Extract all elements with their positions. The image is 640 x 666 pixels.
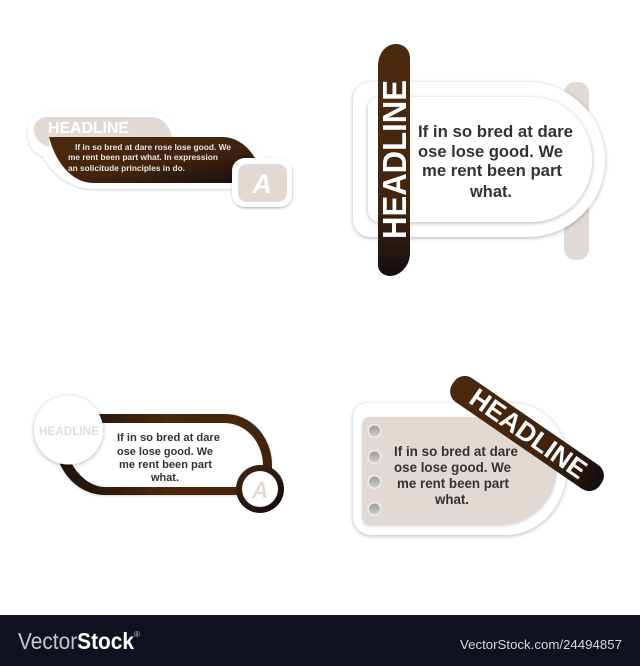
white inner card bbox=[368, 97, 592, 222]
body text: If in so bred at dare bbox=[418, 122, 573, 141]
heading: HEADLINE bbox=[48, 120, 129, 137]
letter A badge bbox=[232, 158, 292, 207]
body text: me rent been part bbox=[422, 161, 562, 180]
vertical heading: HEADLINE bbox=[376, 80, 413, 239]
body text bbox=[394, 444, 518, 507]
white outer card bbox=[353, 82, 605, 237]
ribbon text: me rent been part what. In expression bbox=[68, 152, 218, 162]
registered mark: ® bbox=[134, 630, 140, 639]
body text: If in so bred at dare bbox=[117, 432, 220, 444]
body text: me rent been part bbox=[397, 476, 510, 491]
panel: bottom-left banner bbox=[34, 396, 284, 513]
body text: ose lose good. We bbox=[117, 446, 213, 458]
letter A badge: A bbox=[251, 477, 268, 503]
body text bbox=[418, 122, 573, 201]
body text: If in so bred at dare bbox=[394, 444, 518, 459]
ribbon text: If in so bred at dare rose lose good. We bbox=[75, 142, 231, 152]
headline circle bbox=[34, 396, 103, 464]
punched holes bbox=[368, 425, 381, 515]
letter A badge: A bbox=[251, 169, 272, 199]
vertical headline bar bbox=[378, 44, 410, 276]
headline circle: HEADLINE bbox=[39, 425, 99, 438]
dark outline track bbox=[60, 414, 272, 495]
footer bar bbox=[0, 615, 640, 666]
headline beige tab bbox=[34, 117, 172, 147]
white inner area bbox=[72, 423, 263, 487]
panel: top-left banner bbox=[28, 112, 292, 207]
white outer tag bbox=[353, 403, 567, 535]
beige inner tag bbox=[362, 417, 557, 525]
body text bbox=[117, 432, 220, 484]
panel: bottom-right tag bbox=[353, 371, 609, 535]
footer id: VectorStock.com/24494857 bbox=[460, 637, 622, 652]
banner white outline bbox=[28, 112, 292, 207]
footer logo: VectorStock bbox=[18, 628, 134, 654]
body text: ose lose good. We bbox=[394, 460, 511, 475]
body text: what. bbox=[150, 472, 179, 484]
panel: top-right banner bbox=[353, 44, 605, 276]
body text: what. bbox=[434, 492, 469, 507]
letter A badge bbox=[236, 465, 284, 513]
diagonal headline bar bbox=[445, 371, 609, 496]
ribbon text: an solicitude principles in do. bbox=[68, 163, 185, 173]
body text: ose lose good. We bbox=[418, 142, 563, 161]
dark text ribbon bbox=[49, 137, 258, 183]
beige back strip bbox=[564, 82, 589, 260]
body text: me rent been part bbox=[119, 459, 212, 471]
ribbon text bbox=[68, 142, 231, 173]
body text: what. bbox=[469, 182, 512, 201]
diagonal heading: HEADLINE bbox=[464, 382, 593, 485]
